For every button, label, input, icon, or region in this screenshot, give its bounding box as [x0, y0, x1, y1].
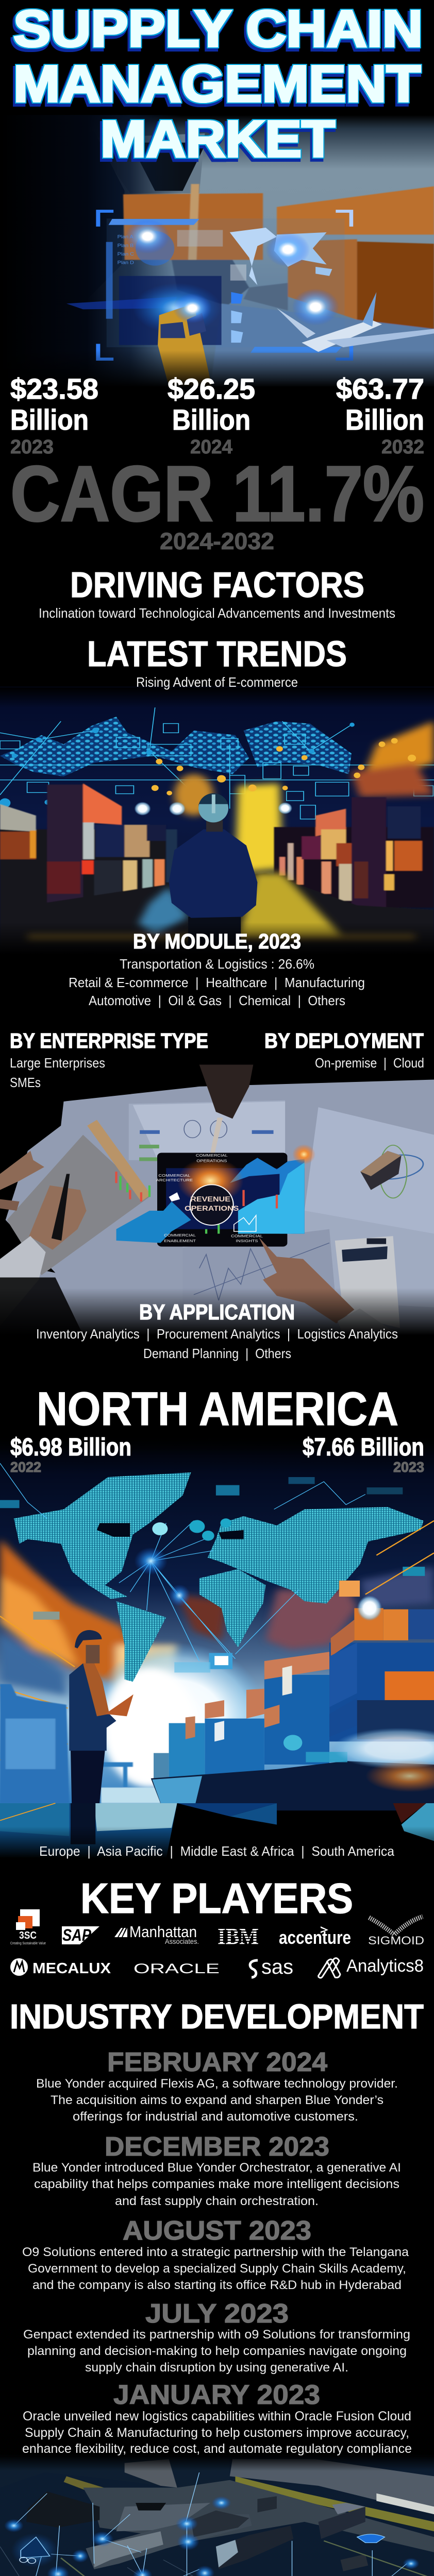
stat: 2022 regional value: [10, 1434, 131, 1475]
driving factor text: Inclination toward Technological Advancements and Investments: [39, 605, 395, 621]
containers left: [0, 784, 434, 956]
stat: 2024 market size: [168, 372, 255, 458]
development: July 2023: [23, 2299, 410, 2375]
panel: by module: [69, 929, 365, 1008]
stat: 2023 market size: Billion: [10, 403, 89, 436]
development: January 2023: [22, 2380, 412, 2456]
development: January 2023: Supply Chain & Manufacturing to help customers improve accuracy,: [25, 2426, 409, 2440]
module list: [69, 956, 365, 1008]
heading: driving factors: DRIVING FACTORS: [70, 565, 364, 605]
photo bottom: quay and water: [0, 1803, 434, 1859]
application list: [36, 1326, 398, 1361]
logo: Manhattan Associates: Manhattan: [129, 1923, 197, 1941]
photo: tablet on desk with analytics hologram: OPERATIONS: [185, 1205, 239, 1213]
development: December 2023: capability that helps companies make more intelligent decisions: [34, 2177, 399, 2191]
containers right: [274, 827, 434, 908]
panel: industry development: [10, 1997, 424, 2456]
stat: 2023 regional value: [303, 1434, 424, 1475]
development: February 2024: The acquisition aims to expand and sharpen Blue Yonder’s: [51, 2093, 383, 2107]
photo: parcels and supply chain hologram: Plan B: [118, 243, 134, 248]
panel: by enterprise type: [10, 1029, 208, 1090]
development: February 2024: offerings for industrial and automotive customers.: [73, 2110, 358, 2124]
development: December 2023: [32, 2132, 401, 2208]
logo: Oracle: ORACLE: [133, 1961, 220, 1976]
logo: IBM: IBM: [218, 1924, 259, 1949]
photo: tablet on desk with analytics hologram: COMMERCIAL: [231, 1233, 263, 1238]
photo: tablet on desk with analytics hologram: COMMERCIAL: [196, 1153, 228, 1158]
development: July 2023: supply chain disruption by using generative AI.: [85, 2361, 348, 2375]
heading: by module: BY MODULE, 2023: [133, 929, 301, 953]
photo: tablet on desk with analytics hologram: COMMERCIAL: [158, 1173, 191, 1178]
photo: worker among shipping containers with data network: [0, 687, 434, 956]
logo: Mecalux: [10, 1958, 111, 1977]
orange links: [0, 1521, 434, 1794]
heading: by application: BY APPLICATION: [139, 1300, 295, 1324]
module list: Automotive | Oil & Gas | Chemical | Others: [89, 993, 345, 1008]
panel: market size statistics: [10, 372, 424, 554]
panel: key players: [10, 1874, 424, 1978]
stat: 2024 market size: $26.25: [168, 372, 255, 405]
heading: key players: KEY PLAYERS: [80, 1874, 353, 1922]
development: December 2023: and fast supply chain orchestration.: [115, 2194, 319, 2208]
stat: 2023 market size: $23.58: [10, 372, 98, 405]
logo: Sigmoid: [368, 1917, 424, 1947]
photo: trucks in connected logistics yard: [0, 2455, 434, 2576]
tablet: [157, 1153, 287, 1247]
development: August 2023: Government to develop a specialized Supply Chain Skills Academy,: [28, 2262, 406, 2276]
logo: SAP: SAP: [62, 1926, 92, 1944]
heading: north america: NORTH AMERICA: [37, 1383, 398, 1435]
logo: Mecalux: MECALUX: [32, 1960, 111, 1977]
photo: tablet on desk with analytics hologram: ARCHITECTURE: [156, 1178, 193, 1182]
glowing nodes: [4, 2496, 420, 2576]
title: SUPPLY CHAIN: [13, 0, 423, 58]
left hands: [0, 1151, 44, 1190]
logo: accenture: accenture: [279, 1927, 351, 1948]
photo: tablet on desk with analytics hologram: OPERATIONS: [196, 1158, 227, 1163]
logo: SAS: sas: [261, 1956, 293, 1978]
panel: by application with tablet photo: [0, 1065, 434, 1366]
glowing warm lights: [174, 721, 434, 873]
lane markings: [61, 2541, 434, 2576]
photo: tablet on desk with analytics hologram: INSIGHTS: [236, 1239, 258, 1243]
data links: [14, 2472, 407, 2576]
logo: Sigmoid: SIGMOID: [368, 1934, 424, 1947]
heading: by enterprise type: BY ENTERPRISE TYPE: [10, 1029, 208, 1053]
CAGR period: 2024-2032: [160, 528, 274, 554]
panel: by deployment: [264, 1029, 424, 1071]
stat: 2023 market size: [10, 372, 98, 458]
development: February 2024: Blue Yonder acquired Flexis AG, a software technology provider.: [36, 2077, 398, 2091]
panel: driving factors: [39, 565, 395, 621]
development: July 2023: planning and decision-making to help companies navigate ongoing: [27, 2344, 407, 2358]
development: August 2023: O9 Solutions entered into a strategic partnership with the Telangana: [22, 2245, 409, 2259]
development: January 2023: Oracle unveiled new logistics capabilities within Oracle Fusion Cloud: [23, 2409, 411, 2424]
photo: port, container ship and global network map: [0, 1438, 434, 1815]
port: [0, 1684, 160, 1803]
module list: Transportation & Logistics : 26.6%: [120, 956, 314, 972]
photo: tablet on desk with analytics hologram: REVENUE: [190, 1196, 230, 1204]
development: February 2024: FEBRUARY 2024: [107, 2047, 327, 2077]
network burst: [0, 1463, 365, 1661]
calculator: [335, 1236, 400, 1328]
container ship: [151, 1596, 434, 1810]
stat: 2032 market size: $63.77: [336, 372, 424, 405]
heading: latest trends: LATEST TRENDS: [87, 634, 347, 674]
development: December 2023: Blue Yonder introduced Blue Yonder Orchestrator, a generative AI: [32, 2161, 401, 2175]
logo: Manhattan Associates: Associates.: [165, 1937, 199, 1945]
title: MANAGEMENT: [13, 55, 421, 113]
panel: latest trends: [0, 634, 434, 1010]
photo: parcels and supply chain hologram: Plan C: [118, 252, 134, 257]
stat: 2023 regional value: 2023: [393, 1459, 424, 1475]
logo: 3SC: 3SC: [19, 1930, 37, 1941]
photo: parcels and supply chain hologram: Plan D: [118, 260, 134, 265]
stat: 2032 market size: Billion: [345, 403, 424, 436]
logo: 3SC: [10, 1909, 46, 1945]
clouds: [0, 1539, 434, 1696]
stat: 2024 market size: 2024: [190, 436, 232, 458]
logo: Analytics8: Analytics8: [346, 1956, 424, 1976]
title: [13, 0, 423, 168]
worker figure: [169, 793, 257, 956]
title: MARKET: [101, 110, 335, 168]
road: [0, 873, 434, 956]
vehicle icons: [8, 2533, 393, 2576]
man with laptop: [69, 1630, 133, 1815]
development: July 2023: Genpact extended its partnership with o9 Solutions for transforming: [23, 2328, 410, 2342]
panel: logistics yard photo: [0, 2455, 434, 2576]
stat: 2022 regional value: $6.98 Billion: [10, 1434, 131, 1461]
panel: north america region: [0, 1383, 434, 1859]
logo: Manhattan Associates: [114, 1923, 199, 1945]
pointing hand top: [199, 1065, 253, 1118]
development: August 2023: [22, 2216, 409, 2292]
photo: tablet on desk with analytics hologram: [0, 1065, 434, 1340]
application list: Inventory Analytics | Procurement Analytics | Logistics Analytics: [36, 1326, 398, 1342]
development: July 2023: JULY 2023: [145, 2299, 289, 2329]
enterprise type list: SMEs: [10, 1075, 41, 1090]
stat: 2032 market size: [336, 372, 424, 458]
stat: 2023 market size: 2023: [10, 436, 54, 458]
photo: parcels and supply chain hologram: [0, 115, 434, 386]
application list: Demand Planning | Others: [143, 1346, 291, 1361]
photo: tablet on desk with analytics hologram: ENABLEMENT: [164, 1239, 196, 1243]
dotted world map: [14, 1472, 424, 1682]
development: January 2023: JANUARY 2023: [113, 2380, 320, 2410]
logo: 3SC: Creating Sustainable Value: [10, 1942, 46, 1945]
enterprise type list: Large Enterprises: [10, 1055, 105, 1071]
stat: 2024 market size: Billion: [172, 403, 251, 436]
development: August 2023: and the company is also starting its office R&D hub in Hyderabad: [32, 2278, 402, 2292]
trucks: [26, 2492, 368, 2576]
stat: 2032 market size: 2032: [381, 436, 424, 458]
module list: Retail & E-commerce | Healthcare | Manufacturing: [69, 975, 365, 990]
development: February 2024: [36, 2047, 398, 2124]
development: December 2023: DECEMBER 2023: [105, 2132, 329, 2162]
panel: hero photo and title: [0, 0, 434, 399]
development: August 2023: AUGUST 2023: [123, 2216, 311, 2246]
stat: 2022 regional value: 2022: [10, 1459, 41, 1475]
pointing hand bottom: [259, 1237, 354, 1324]
development: January 2023: enhance flexibility, reduce cost, and automate regulatory compliance: [22, 2442, 412, 2456]
logo: Analytics8: [318, 1956, 424, 1978]
latest trend text: Rising Advent of E-commerce: [136, 674, 298, 690]
photo: tablet on desk with analytics hologram: COMMERCIAL: [164, 1233, 196, 1238]
enterprise type list: [10, 1055, 105, 1090]
photo: parcels and supply chain hologram: Plan A: [118, 234, 133, 240]
other regions list: Europe | Asia Pacific | Middle East & Africa | South America: [39, 1843, 395, 1859]
